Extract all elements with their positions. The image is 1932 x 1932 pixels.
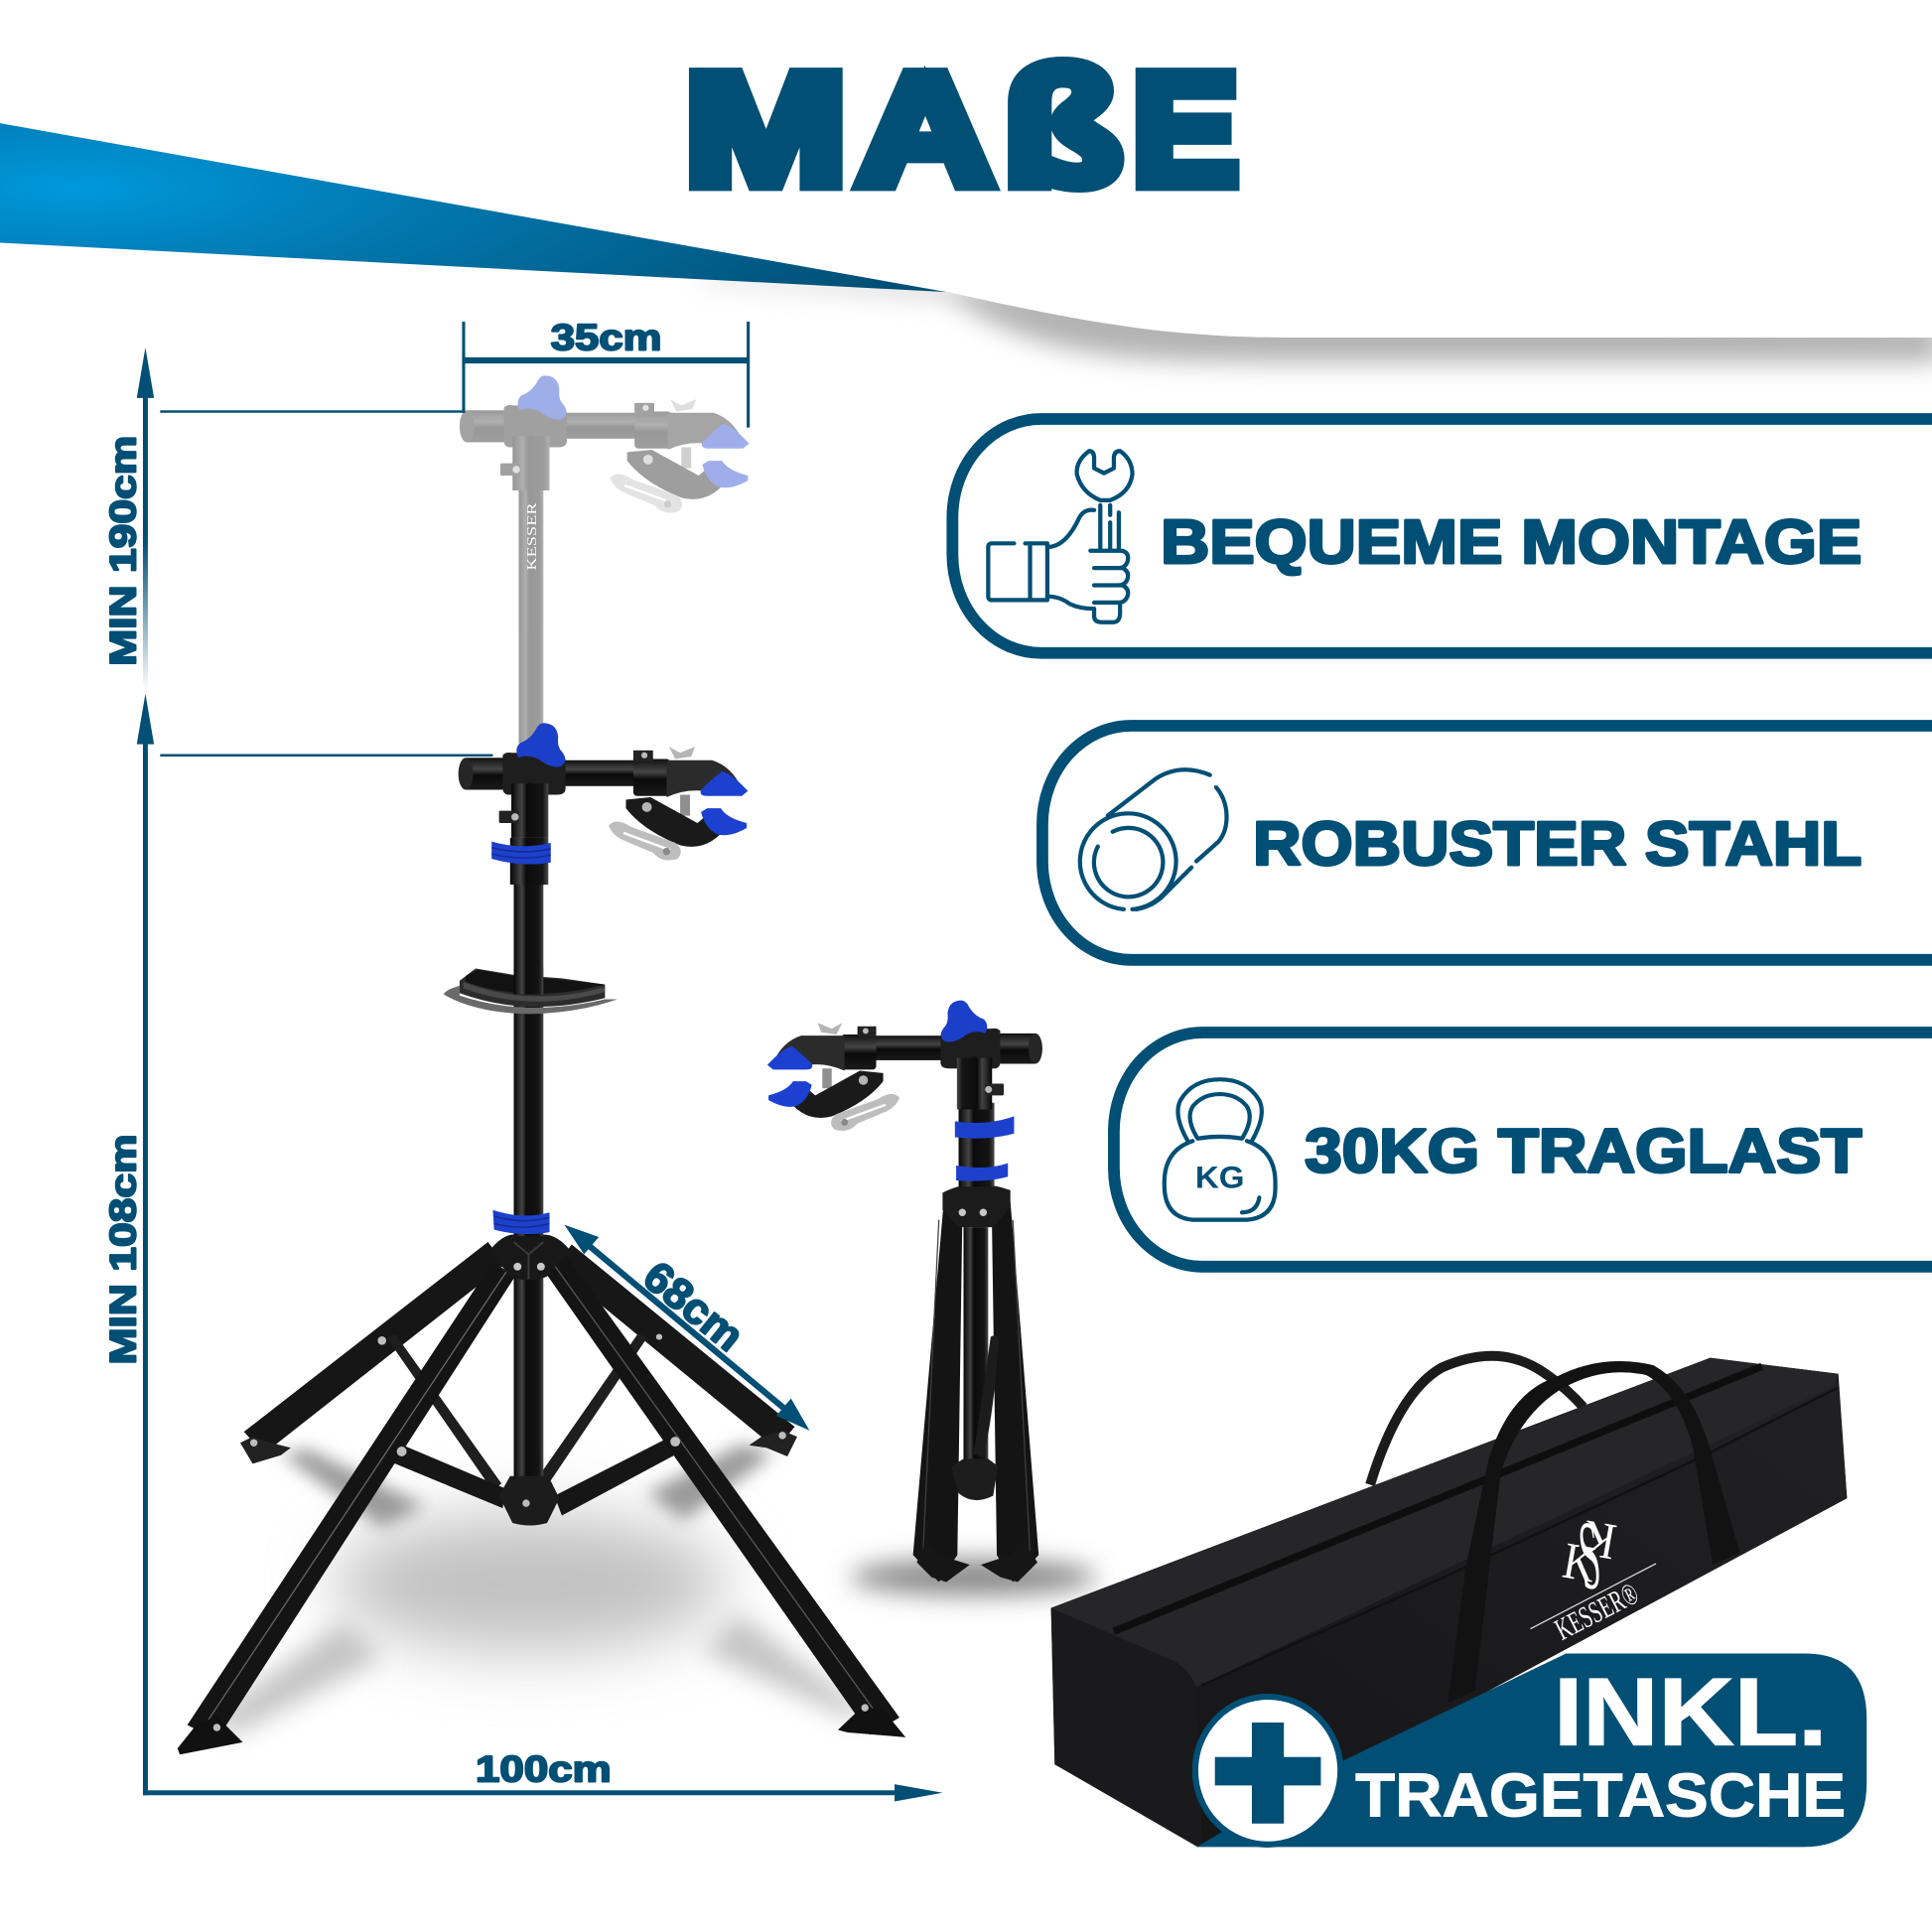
panel: 30kg traglast	[1114, 1033, 1932, 1267]
label: 30KG TRAGLAST	[1305, 1117, 1862, 1185]
badge: inkl. tragetasche	[1195, 1654, 1866, 1847]
right leg group	[992, 1201, 1038, 1583]
title: ß	[1003, 35, 1121, 219]
header blue wedge	[0, 123, 946, 292]
icon: kettlebell	[1165, 1079, 1276, 1220]
kesser label on pole: KESSER	[524, 501, 539, 571]
dimension: arm width 35cm: 35cm	[551, 316, 661, 357]
dimension: arm width 35cm	[462, 316, 750, 428]
dimension: vertical min 108cm	[102, 694, 154, 1795]
leg length dimension 68cm: 68cm	[634, 1253, 753, 1361]
zipper	[1114, 1366, 1762, 1631]
main stand	[178, 723, 905, 1754]
front braces	[389, 1442, 505, 1508]
ground shadow folded stand	[850, 1559, 1097, 1595]
clamp head	[459, 723, 748, 861]
dimension: vertical min 190cm	[102, 347, 154, 696]
rear handle	[1370, 1356, 1584, 1484]
icon: plus circle	[1195, 1697, 1340, 1845]
left leg group	[913, 1201, 962, 1583]
header shadow	[0, 0, 1932, 362]
folded stand	[767, 1001, 1042, 1583]
tool tray	[444, 967, 618, 1014]
raised clamp ghost	[460, 375, 750, 743]
brace	[973, 1335, 999, 1457]
logo: S	[1575, 1501, 1605, 1610]
blue collar upper	[491, 842, 551, 865]
title: A	[858, 41, 993, 217]
blue collar lower	[492, 1210, 550, 1234]
collars	[955, 1116, 1014, 1181]
logo: KESSER®	[1549, 1576, 1644, 1647]
bottom hub	[951, 1458, 998, 1500]
centre pole upper	[514, 863, 543, 1236]
carry bag	[1051, 1356, 1847, 1847]
hub	[942, 1184, 1011, 1227]
end face	[1051, 1608, 1202, 1847]
centre pole lower	[514, 1277, 543, 1480]
bottom hub	[499, 1476, 559, 1525]
logo	[1530, 1501, 1656, 1647]
feet	[916, 1540, 970, 1583]
front face	[1196, 1382, 1847, 1847]
label: ROBUSTER STAHL	[1253, 810, 1862, 879]
front legs	[188, 1262, 515, 1739]
pivot bolts	[213, 1333, 869, 1731]
logo: K	[1579, 1509, 1620, 1570]
title: E	[1133, 41, 1238, 217]
silhouette	[1051, 1358, 1847, 1847]
front handle strap	[1448, 1361, 1739, 1703]
back legs	[244, 1242, 505, 1453]
top face	[1051, 1358, 1839, 1687]
dimension: vertical min 108cm: MIN 108cm	[102, 1134, 144, 1364]
icon: steel cylinder	[1080, 769, 1227, 909]
mirrored clamp head	[767, 1001, 1042, 1131]
badge text: INKL.	[1554, 1657, 1828, 1765]
rear braces	[387, 1334, 501, 1491]
icon: hand with wrench	[988, 451, 1133, 622]
stem	[959, 1103, 995, 1186]
badge: inkl. tragetasche: TRAGETASCHE	[1355, 1761, 1846, 1830]
ground shadow main stand	[209, 1445, 869, 1734]
panel: bequeme montage	[952, 419, 1932, 653]
leg length dimension 68cm	[564, 1225, 809, 1431]
dimension: vertical min 190cm: MIN 190cm	[102, 436, 144, 666]
inner pole	[964, 1227, 988, 1467]
dimension: horizontal 100cm	[143, 1748, 942, 1801]
title	[685, 35, 1238, 219]
seam	[1201, 1387, 1839, 1686]
title: M	[685, 41, 847, 217]
feet	[178, 1717, 242, 1754]
dimension: guide lines	[160, 410, 492, 757]
logo: K	[1559, 1533, 1600, 1593]
panel: robuster stahl	[1042, 726, 1932, 960]
dimension: horizontal 100cm: 100cm	[476, 1748, 612, 1790]
label: BEQUEME MONTAGE	[1161, 508, 1862, 577]
top hub	[490, 1235, 569, 1280]
panel: 30kg traglast: KG	[1195, 1160, 1244, 1194]
